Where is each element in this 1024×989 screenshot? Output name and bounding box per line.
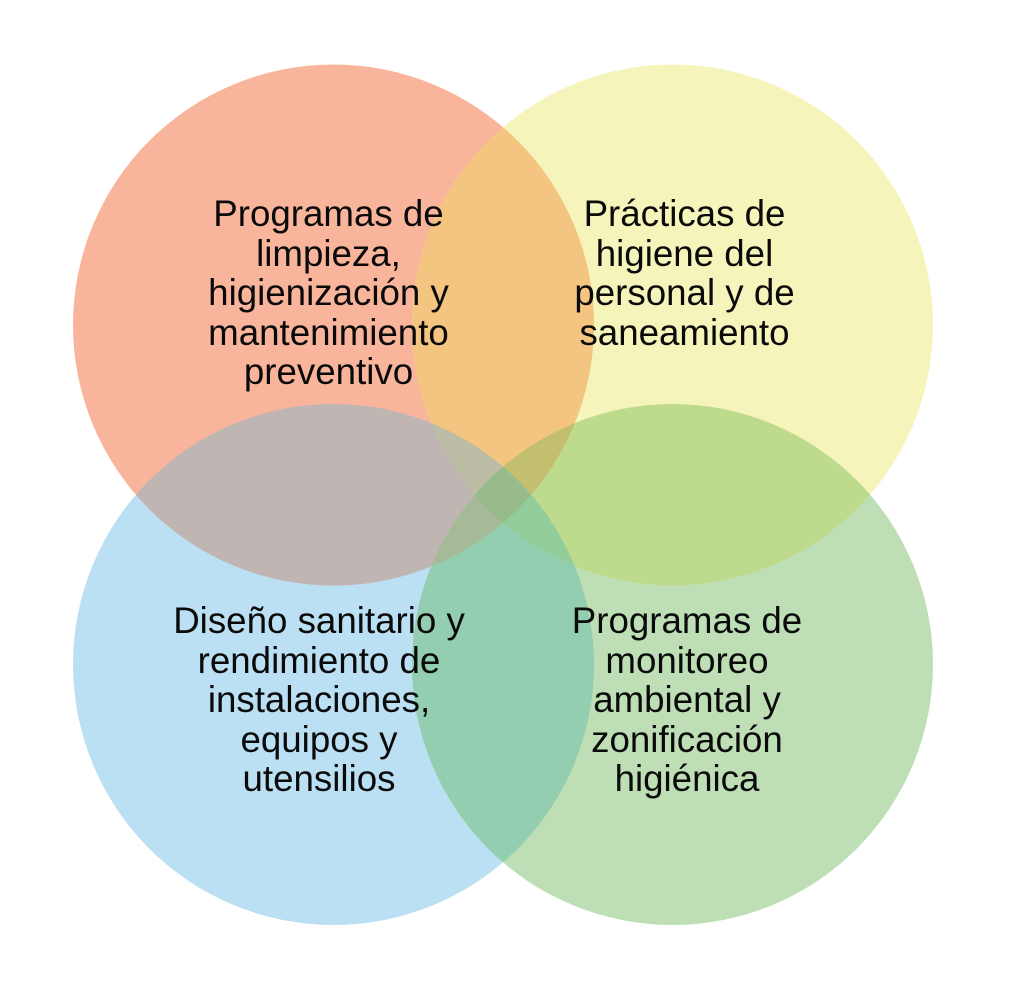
text: environmental monitoring: zonificación xyxy=(591,719,783,760)
text: environmental monitoring: ambiental y xyxy=(593,679,781,720)
overlap: red and blue xyxy=(136,404,502,586)
text: personal hygiene: personal y de xyxy=(574,272,795,313)
text: environmental monitoring: monitoreo xyxy=(605,640,769,681)
overlap: yellow, blue and green xyxy=(476,467,575,566)
overlap: red and yellow xyxy=(412,127,594,466)
overlap: red, yellow and blue xyxy=(432,423,502,494)
circle: blue, sanitary design xyxy=(73,404,594,925)
text: cleaning programs: higienización y xyxy=(208,272,449,313)
text: environmental monitoring: Programas de xyxy=(572,600,802,641)
venn diagram xyxy=(73,64,933,925)
text: cleaning programs: preventivo xyxy=(244,351,413,392)
text: sanitary design: equipos y xyxy=(240,719,398,760)
text: personal hygiene: higiene del xyxy=(596,233,773,274)
overlap: all four circles xyxy=(475,467,531,522)
overlap: yellow and green xyxy=(504,404,870,586)
circle: green, environmental monitoring xyxy=(412,404,933,925)
text: sanitary design: utensilios xyxy=(243,758,395,799)
text: personal hygiene: Prácticas de xyxy=(584,193,785,234)
circle: red, cleaning programs xyxy=(73,64,594,586)
overlap: blue and green xyxy=(412,496,594,862)
text: environmental monitoring: higiénica xyxy=(615,758,760,799)
text: sanitary design: instalaciones, xyxy=(208,679,430,720)
circle: yellow, personal hygiene xyxy=(412,64,933,586)
overlap: red, blue and green xyxy=(431,495,503,566)
text: sanitary design: rendimiento de xyxy=(198,640,440,681)
text: cleaning programs: limpieza, xyxy=(256,233,401,274)
overlap: red, yellow and green xyxy=(503,423,575,494)
text: cleaning programs: Programas de xyxy=(213,193,444,234)
text: cleaning programs: mantenimiento xyxy=(208,312,449,353)
text: sanitary design: Diseño sanitario y xyxy=(173,600,465,641)
text: personal hygiene: saneamiento xyxy=(579,312,790,353)
